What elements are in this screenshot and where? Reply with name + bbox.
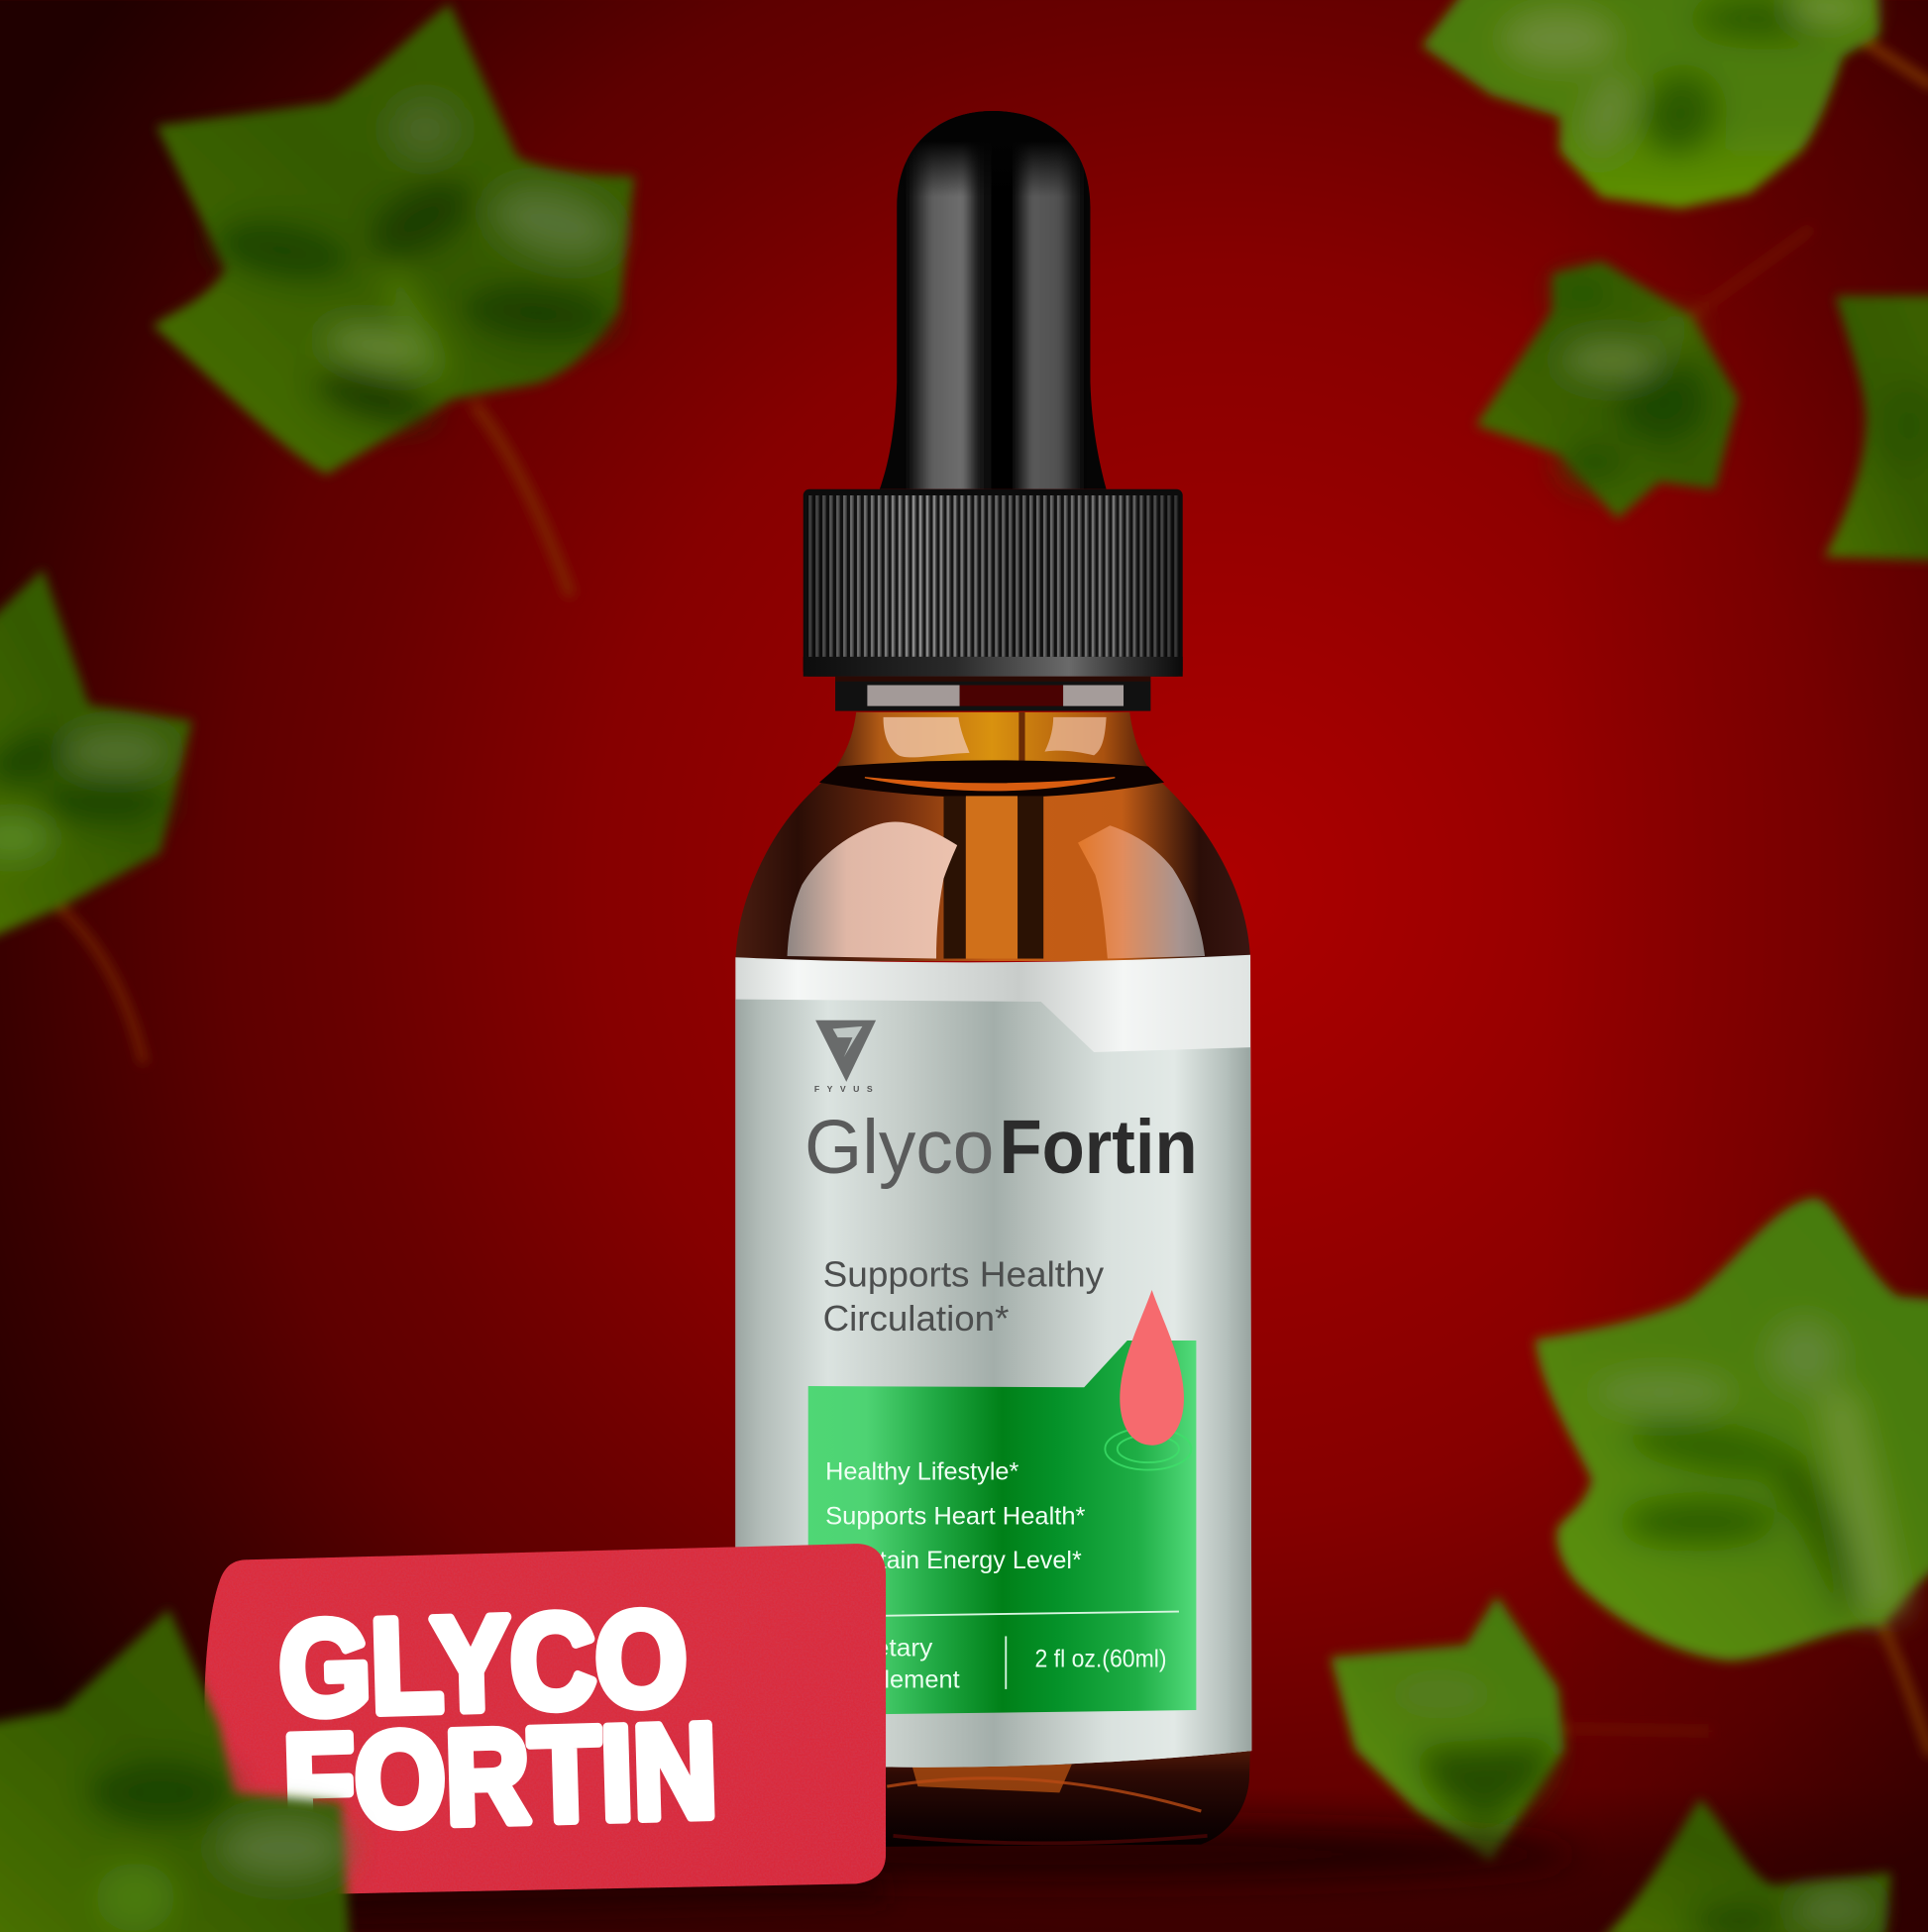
- label grey panel: [735, 1000, 1251, 1768]
- tagline: Circulation*: [823, 1298, 1009, 1339]
- green benefits panel: [808, 1341, 1196, 1715]
- leaf: right edge: [1825, 296, 1928, 561]
- volume text: 2 fl oz.(60ml): [1034, 1646, 1167, 1673]
- amber shoulder and glass: [735, 774, 1250, 961]
- card title: [277, 1583, 719, 1857]
- product name bold: Fortin: [999, 1105, 1198, 1190]
- knurled cap: [803, 489, 1183, 677]
- supplement text: [825, 1634, 960, 1694]
- card title: FORTIN: [281, 1696, 719, 1857]
- tagline: Supports Healthy: [823, 1253, 1104, 1294]
- card title: GLYCO: [277, 1583, 689, 1744]
- dropper bottle: [735, 105, 1251, 1847]
- supplement text: Supplement: [825, 1666, 960, 1694]
- benefits list: [825, 1458, 1086, 1574]
- leaf: bottom left foreground: [0, 1609, 350, 1932]
- icon: blood drop with ripples: [1105, 1290, 1191, 1470]
- amber neck: [831, 712, 1152, 774]
- card shadow: [247, 1873, 887, 1916]
- red name card: [204, 1544, 886, 1893]
- bottle shadow on floor: [542, 1827, 1577, 1881]
- dropper tube: [943, 796, 1043, 959]
- liquid surface: [819, 760, 1164, 798]
- panel divider: [825, 1612, 1179, 1617]
- bottle base: [735, 1744, 1250, 1847]
- vertical divider: [1005, 1636, 1007, 1689]
- benefits list: Healthy Lifestyle*: [825, 1458, 1019, 1486]
- neck ring: [835, 677, 1150, 711]
- glass highlight right: [1078, 825, 1205, 959]
- leaf: upper right small: [1476, 228, 1812, 519]
- brand logo: FYVUS: FYVUS: [814, 1084, 880, 1094]
- glass highlight left: [788, 821, 957, 959]
- benefits list: Maintain Energy Level*: [825, 1547, 1082, 1574]
- leaf: lower right small: [1331, 1595, 1712, 1861]
- label white band: [735, 955, 1251, 1768]
- brand logo: FYVUS: [814, 1020, 880, 1094]
- benefits list: Supports Heart Health*: [825, 1502, 1086, 1530]
- leaf: top left: [153, 4, 634, 591]
- supplement text: Dietary: [850, 1634, 933, 1662]
- leaf: bottom right: [1601, 1799, 1891, 1932]
- dropper bulb: [875, 105, 1115, 493]
- leaf: large lower right: [1535, 1198, 1928, 1756]
- leaf: top right: [1422, 0, 1928, 208]
- leaf: left edge: [0, 570, 192, 1060]
- background: right side vignette: [1540, 0, 1928, 1932]
- floor shadow band: [0, 1786, 1928, 1932]
- label: [735, 955, 1251, 1768]
- product name: Glyco: [804, 1105, 994, 1190]
- tagline: [823, 1253, 1104, 1339]
